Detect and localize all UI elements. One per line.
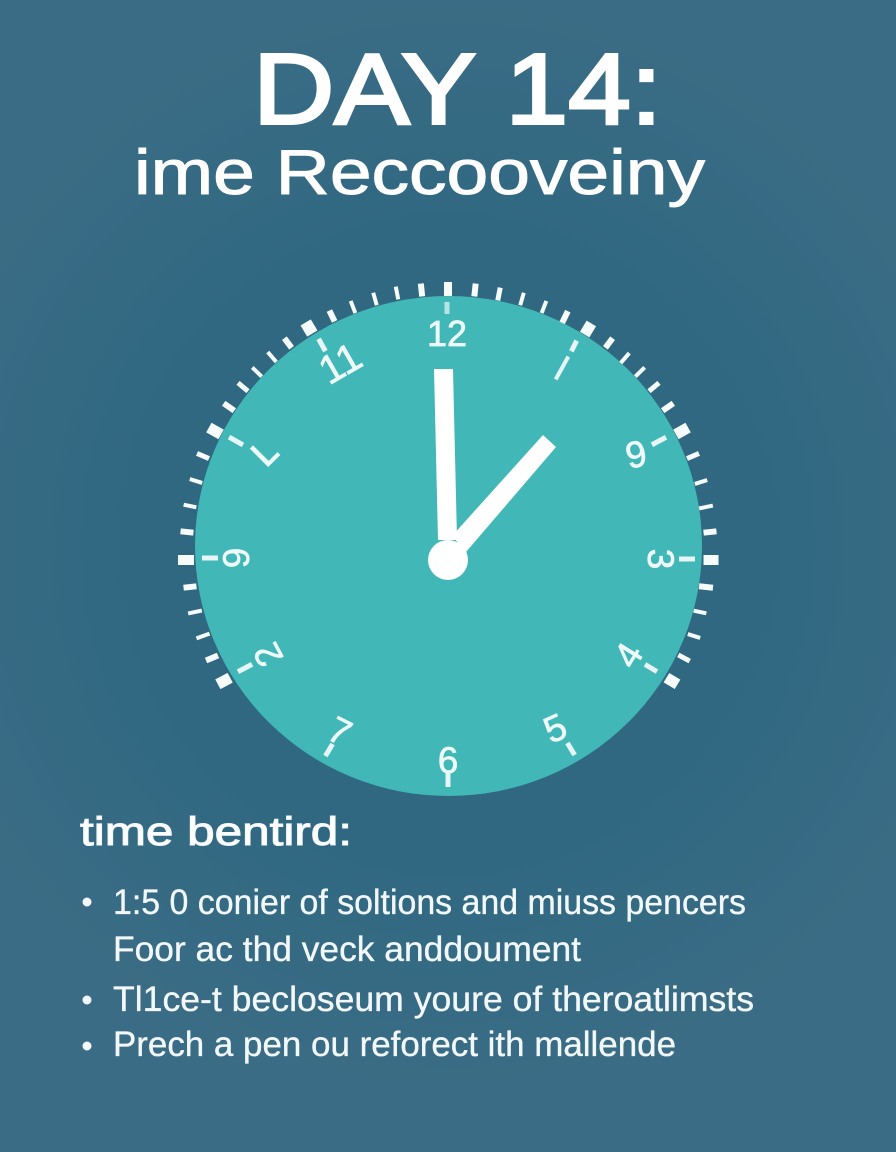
clock numerals: 12 bbox=[427, 313, 467, 354]
inner hour marks bbox=[202, 302, 695, 787]
bullet list bbox=[82, 883, 754, 1064]
clock bbox=[178, 282, 718, 796]
clock numerals: 5 bbox=[537, 706, 573, 751]
clock numerals: 3 bbox=[640, 549, 681, 569]
bullet item 3: Prech a pen ou reforect ith mallende bbox=[113, 1025, 676, 1064]
title: DAY 14: bbox=[253, 34, 662, 146]
clock numerals: 4 bbox=[606, 636, 651, 675]
bullet item 1 bbox=[82, 883, 746, 969]
section heading: time bentird: bbox=[80, 810, 352, 854]
bullet item 1: Foor ac thd veck anddoument bbox=[113, 930, 581, 969]
clock numerals: 9 bbox=[622, 432, 650, 477]
clock numerals: 9 bbox=[216, 548, 257, 568]
bullet item 1: 1:5 0 conier of soltions and miuss pencers bbox=[113, 883, 746, 922]
clock numerals: L bbox=[243, 431, 286, 474]
minute hand bbox=[434, 369, 457, 540]
clock numerals: 7 bbox=[321, 709, 358, 754]
subtitle: ime Reccooveiny bbox=[134, 138, 706, 208]
clock numerals bbox=[216, 313, 681, 781]
center hub bbox=[428, 540, 468, 580]
clock face bbox=[195, 296, 702, 796]
outer tick ring bbox=[178, 282, 718, 689]
hour hand bbox=[452, 435, 556, 552]
clock numerals: 2 bbox=[246, 636, 291, 673]
bullet item 2: Tl1ce-t becloseum youre of theroatlimsts bbox=[113, 980, 754, 1019]
clock numerals: 11 bbox=[312, 334, 369, 393]
clock numerals: 6 bbox=[438, 740, 458, 781]
